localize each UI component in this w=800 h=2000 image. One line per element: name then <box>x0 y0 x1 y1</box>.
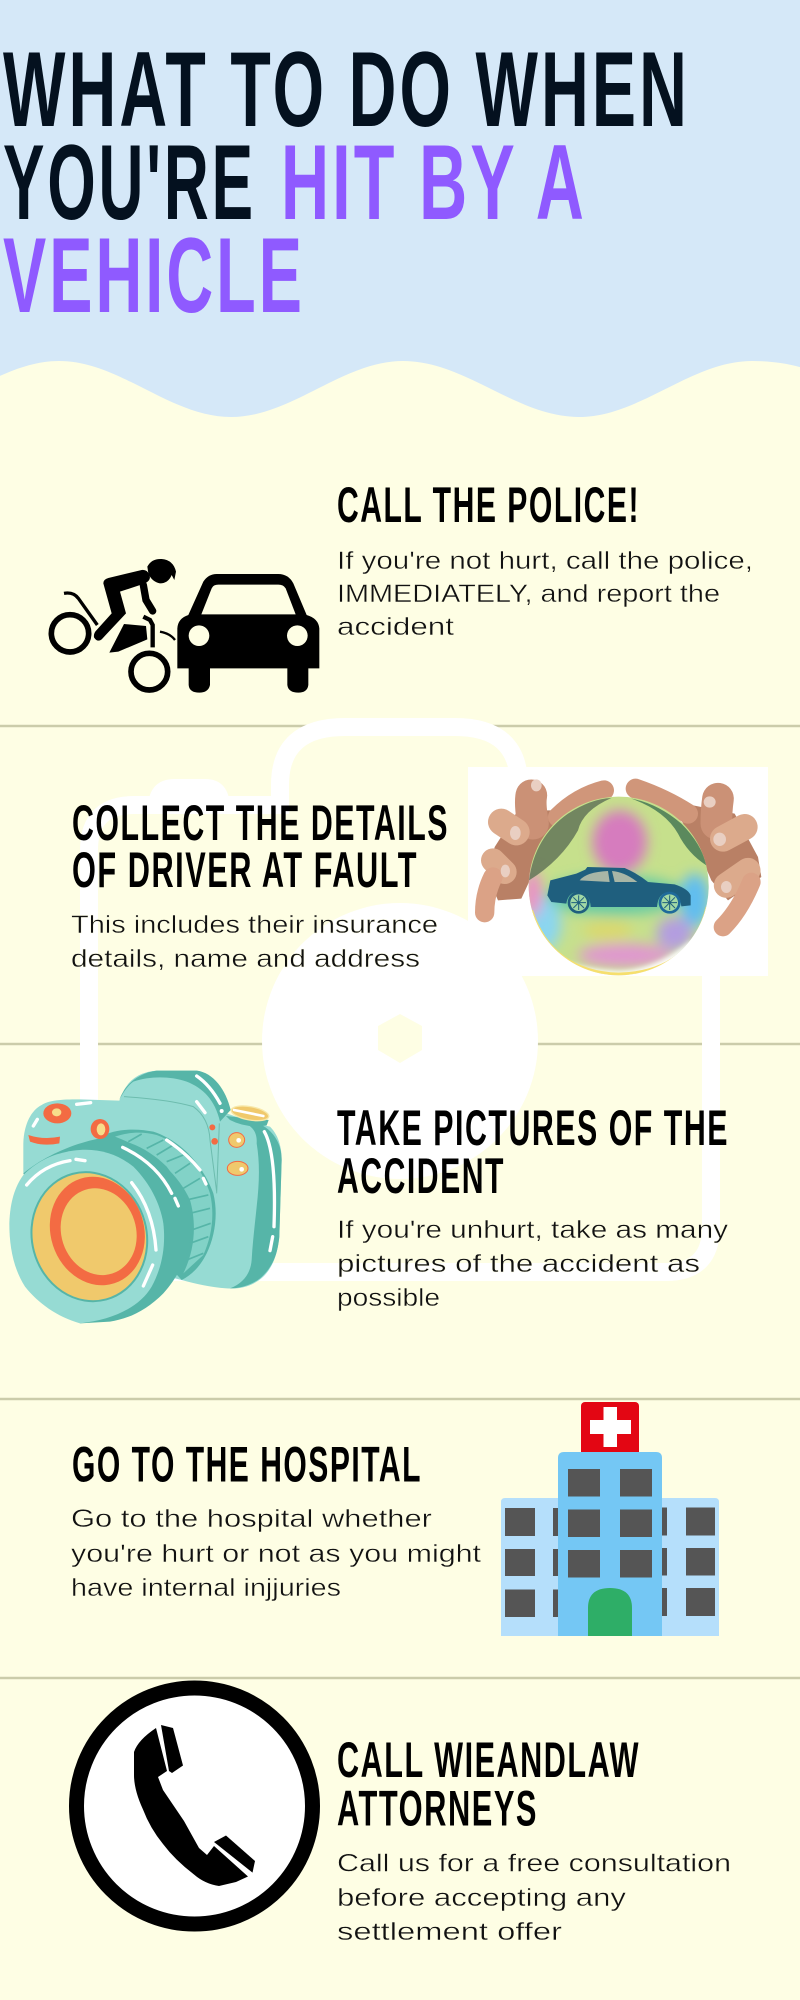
text block: call attorneys: Call us for a free consultation <box>337 1850 731 1878</box>
text block: call the police: IMMEDIATELY, and report the <box>337 580 720 608</box>
icon: telephone in circle <box>76 1688 312 1924</box>
text block: take pictures: If you're unhurt, take as many <box>337 1216 729 1244</box>
text block: take pictures: possible <box>337 1284 440 1312</box>
heading: collect details: OF DRIVER AT FAULT <box>72 842 418 898</box>
heading: take pictures <box>337 1100 729 1204</box>
panel: go to the hospital <box>71 1402 719 1636</box>
text block: call attorneys: before accepting any <box>337 1884 627 1912</box>
text block: call the police <box>337 547 753 641</box>
heading: call attorneys <box>337 1732 640 1836</box>
background camera outline watermark <box>89 727 711 1272</box>
text block: collect details: This includes their insurance <box>71 911 438 939</box>
panel: call the police <box>51 477 753 693</box>
heading: call attorneys: ATTORNEYS <box>337 1780 538 1836</box>
icon: teal camera <box>9 1071 282 1323</box>
title <box>3 29 690 335</box>
text block: call the police: accident <box>337 613 454 641</box>
title: HIT BY A <box>281 122 587 242</box>
text block: collect details: details, name and address <box>71 945 420 973</box>
panel: collect details <box>71 767 768 980</box>
text block: go to the hospital: you're hurt or not as you might <box>71 1540 481 1568</box>
text block: go to the hospital: have internal injjuries <box>71 1574 341 1602</box>
text block: collect details <box>71 911 438 973</box>
icon: hands around car bubble <box>468 767 768 980</box>
text block: call attorneys <box>337 1850 731 1946</box>
title: YOU'RE <box>3 122 256 242</box>
heading: go to the hospital: GO TO THE HOSPITAL <box>72 1436 422 1492</box>
icon: bicycle hitting car <box>51 559 319 693</box>
text block: go to the hospital <box>71 1505 481 1602</box>
heading: collect details: COLLECT THE DETAILS <box>72 795 449 851</box>
text block: take pictures <box>337 1216 729 1312</box>
panel: call attorneys <box>76 1688 731 1946</box>
heading: take pictures: ACCIDENT <box>337 1148 505 1204</box>
text block: take pictures: pictures of the accident as <box>337 1250 700 1278</box>
title: VEHICLE <box>3 215 305 335</box>
icon: hospital building <box>501 1402 719 1636</box>
header wave band <box>0 0 800 417</box>
text block: go to the hospital: Go to the hospital whether <box>71 1505 432 1533</box>
text block: call the police: If you're not hurt, call the police, <box>337 547 753 575</box>
panel: take pictures <box>9 1071 729 1323</box>
heading: collect details <box>72 795 449 898</box>
text block: call attorneys: settlement offer <box>337 1918 562 1946</box>
